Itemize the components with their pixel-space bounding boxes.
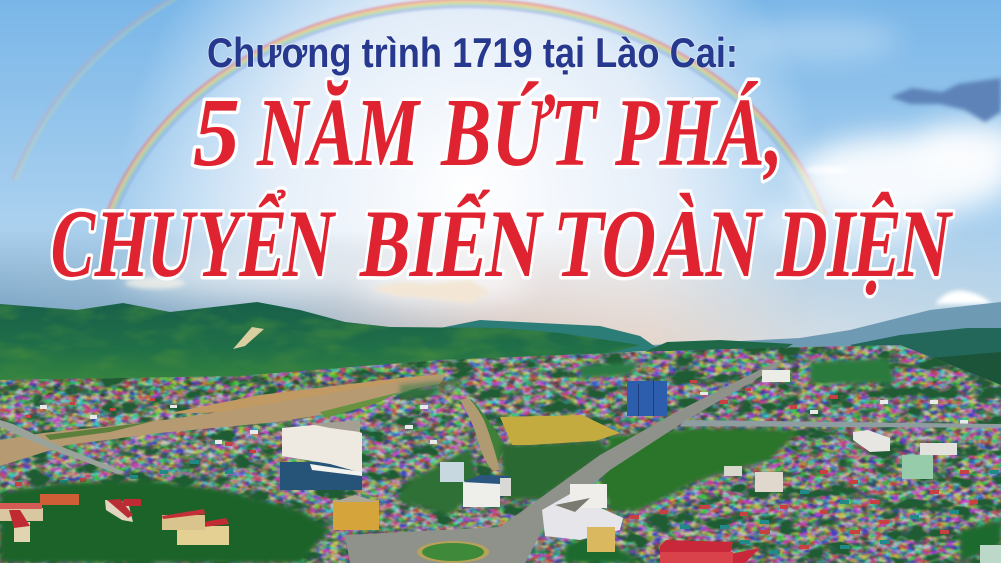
headline line 2: BIẾN xyxy=(355,188,548,298)
headline line 1 xyxy=(193,79,783,186)
city base xyxy=(0,345,1001,563)
buildings: hotel complex xyxy=(280,420,511,530)
buildings: red-roof campus xyxy=(0,494,229,545)
green areas xyxy=(0,358,1001,563)
yellow rice field xyxy=(500,415,620,445)
highway and roundabout xyxy=(345,362,1001,563)
far mountains xyxy=(440,302,1001,386)
river and banks xyxy=(0,374,505,474)
headline line 1: 5 xyxy=(193,79,240,186)
roundabout xyxy=(417,541,489,563)
headline line 1: NĂM xyxy=(256,79,421,186)
headline line 1: BỨT xyxy=(440,79,599,186)
headline line 2: CHUYỂN xyxy=(43,189,340,298)
buildings: downtown xyxy=(440,370,1001,563)
house roofs scattered xyxy=(15,380,999,554)
sky background xyxy=(0,0,1001,360)
clouds xyxy=(120,20,1001,304)
headline line 2 xyxy=(43,188,957,298)
rainbow arcs xyxy=(12,0,826,215)
green mountains left xyxy=(0,302,640,380)
headline line 2: TOÀN xyxy=(548,190,767,298)
subtitle: Chương trình 1719 tại Lào Cai: xyxy=(207,29,738,76)
headline line 1: PHÁ, xyxy=(614,79,783,186)
title block xyxy=(43,29,957,298)
